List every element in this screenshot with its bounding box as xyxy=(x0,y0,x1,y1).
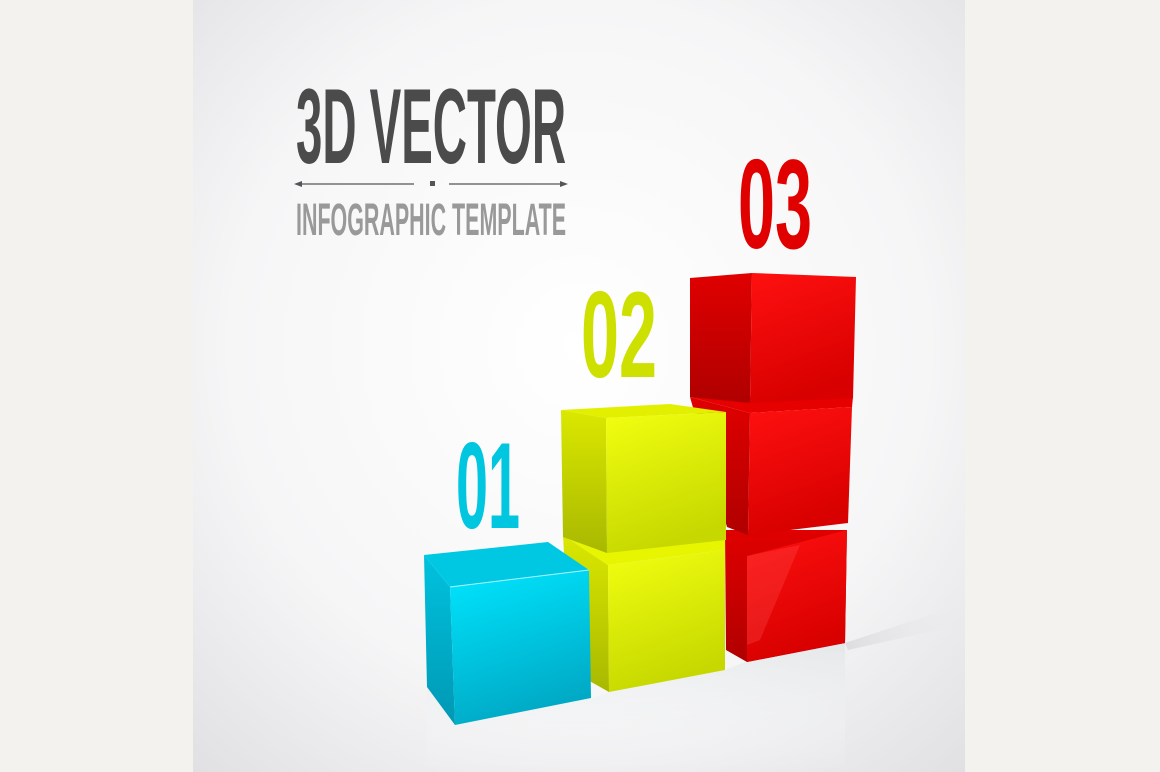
red cube bottom xyxy=(725,530,847,662)
number 03: 03 xyxy=(738,133,812,275)
yellow cube upper xyxy=(561,404,726,553)
divider arrow xyxy=(294,181,568,187)
red cube top xyxy=(690,273,856,403)
shadow xyxy=(845,605,960,650)
reflection xyxy=(427,643,845,772)
yellow cube lower xyxy=(563,535,725,692)
blue cube xyxy=(424,542,591,725)
background panel xyxy=(193,0,965,772)
number 01: 01 xyxy=(456,418,520,555)
number 02: 02 xyxy=(581,267,657,404)
title: 3D VECTOR xyxy=(296,67,566,186)
subtitle: INFOGRAPHIC TEMPLATE xyxy=(296,195,566,246)
red cube middle xyxy=(690,397,853,535)
